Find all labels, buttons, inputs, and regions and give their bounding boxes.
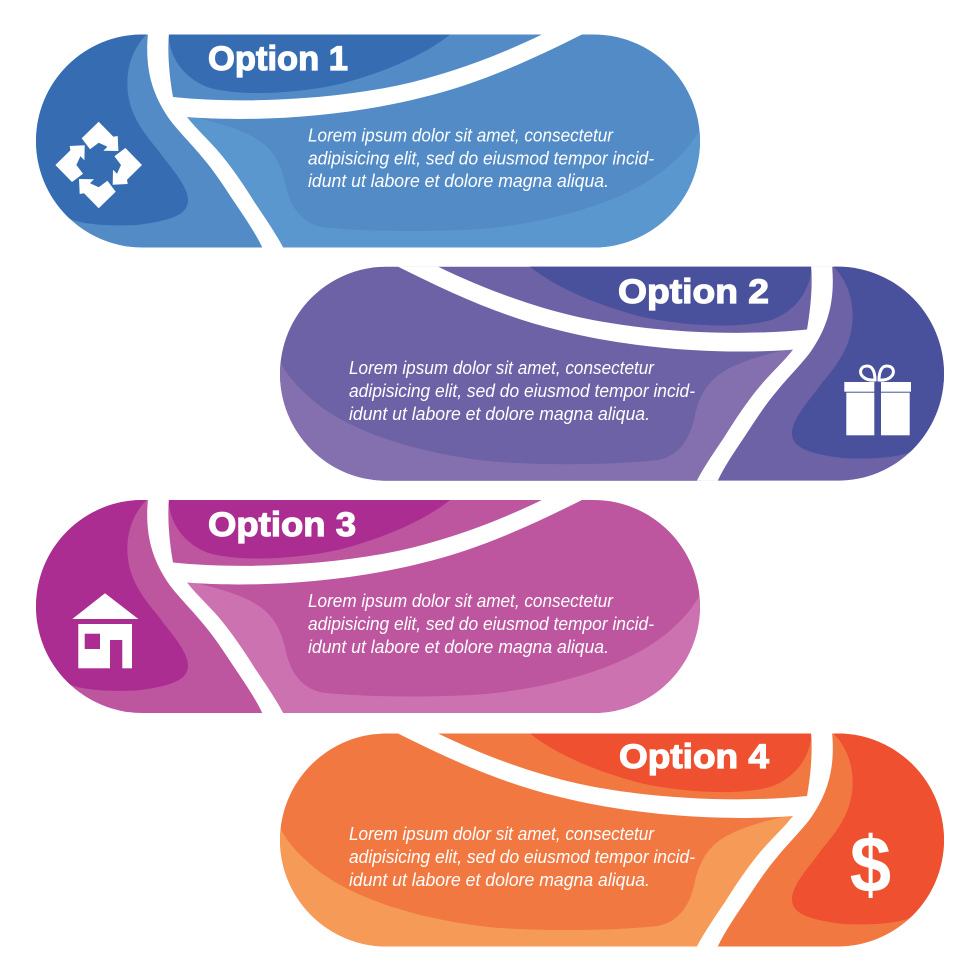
banner shape: option 3	[20, 486, 702, 716]
text block: option 2: Lorem ipsum dolor sit amet, consectetur	[349, 357, 655, 378]
text block: option 3: adipisicing elit, sed do eiusmod tempor incid-	[308, 613, 654, 634]
banner shape: option 1	[20, 20, 702, 250]
text block: option 1: idunt ut labore et dolore magna aliqua.	[308, 170, 609, 191]
text block: option 3: idunt ut labore et dolore magna aliqua.	[308, 636, 609, 657]
banner shape: option 4	[278, 719, 960, 949]
text block: option 1: adipisicing elit, sed do eiusmod tempor incid-	[308, 148, 654, 168]
icon: house	[72, 593, 138, 668]
heading: option 1: Option 1	[208, 40, 348, 78]
panel: option 3	[20, 486, 702, 716]
text block: option 1	[308, 124, 654, 191]
heading: option 3: Option 3	[208, 506, 356, 544]
heading: option 4: Option 4	[619, 738, 769, 776]
text block: option 4: adipisicing elit, sed do eiusmod tempor incid-	[349, 846, 695, 867]
panel: option 2	[278, 252, 960, 483]
text block: option 2	[349, 357, 695, 424]
banner shape: option 2	[278, 252, 960, 483]
icon: four rotating arrows	[55, 122, 142, 208]
text block: option 4	[349, 823, 695, 890]
icon: gift box	[844, 366, 911, 435]
heading: option 2: Option 2	[618, 273, 769, 311]
text block: option 1: Lorem ipsum dolor sit amet, consectetur	[308, 124, 614, 146]
text block: option 4: Lorem ipsum dolor sit amet, consectetur	[349, 823, 655, 844]
text block: option 2: adipisicing elit, sed do eiusmod tempor incid-	[349, 380, 695, 401]
text block: option 3: Lorem ipsum dolor sit amet, consectetur	[308, 590, 614, 611]
text block: option 3	[308, 590, 654, 657]
panel: option 4	[278, 719, 960, 949]
text block: option 4: idunt ut labore et dolore magna aliqua.	[349, 869, 650, 890]
panel: option 1	[20, 20, 702, 250]
text block: option 2: idunt ut labore et dolore magna aliqua.	[349, 403, 650, 424]
icon: dollar sign: $	[850, 821, 891, 910]
